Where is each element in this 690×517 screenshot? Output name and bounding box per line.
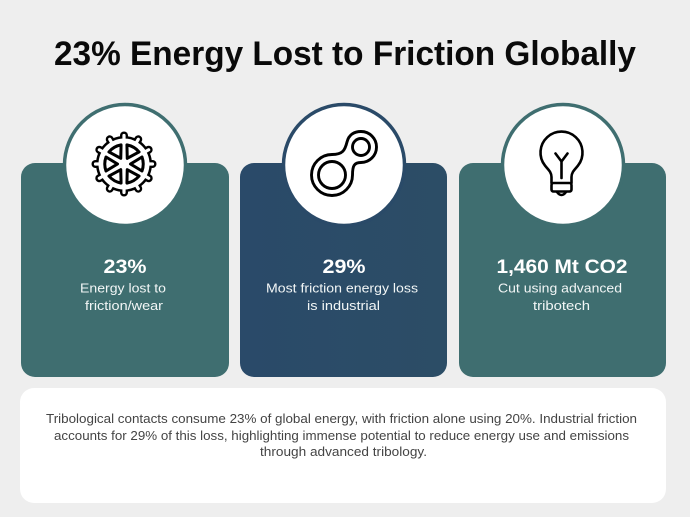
stat: 29%: 29%	[322, 257, 366, 278]
icon: light bulb	[502, 104, 624, 226]
panel: industrial loss	[240, 104, 447, 377]
panel: CO2 cut	[459, 104, 666, 377]
label: tribotech: Cut using advanced	[498, 280, 622, 296]
panel: summary	[20, 388, 666, 503]
label: industrial: Most friction energy loss	[266, 280, 419, 296]
icon: carabiner ring	[284, 104, 404, 226]
summary text: Tribological contacts consume 23% of global energy, with friction alone using 20%. Industrial friction	[46, 412, 637, 426]
stat: 23%: 23%	[104, 257, 147, 278]
label: energy lost: friction/wear	[85, 298, 164, 313]
icon: gear	[64, 104, 186, 226]
title: 23% Energy Lost to Friction Globally	[54, 35, 636, 73]
summary text: accounts for 29% of this loss, highlighting immense potential to reduce energy use and emissions	[54, 429, 629, 443]
label: energy lost: Energy lost to	[80, 280, 166, 296]
label: tribotech: tribotech	[533, 298, 590, 313]
label: industrial: is industrial	[307, 298, 380, 313]
panel: energy lost	[21, 104, 229, 377]
stat: CO2: 1,460 Mt CO2	[496, 257, 628, 278]
summary text: through advanced tribology.	[260, 445, 427, 459]
